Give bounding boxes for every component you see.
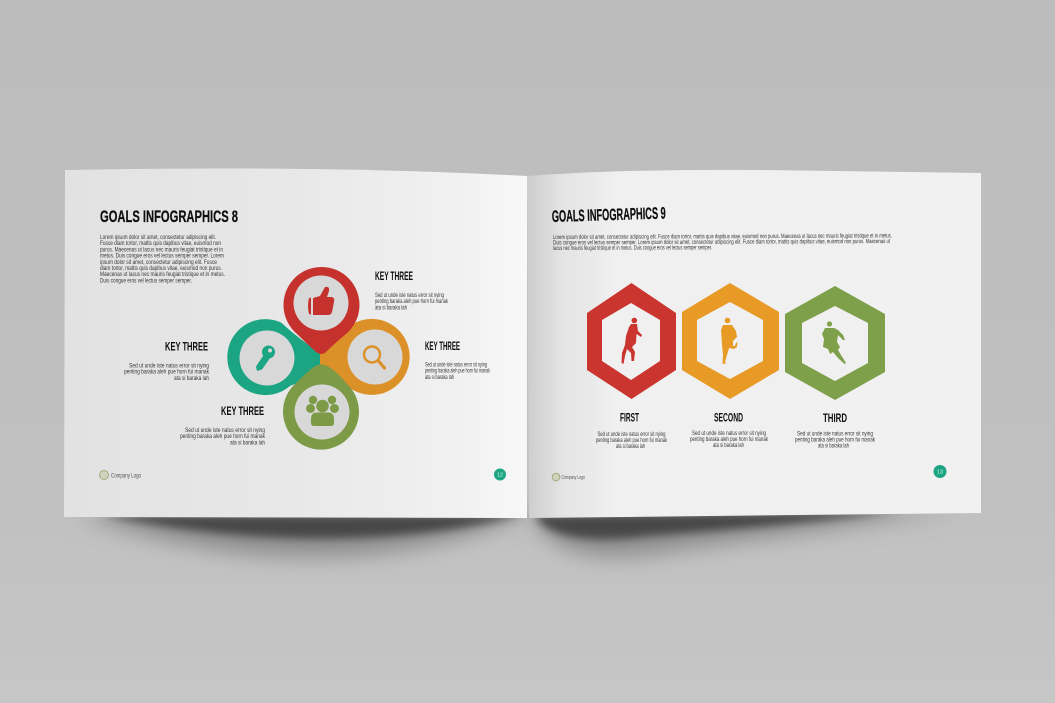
intro text left page: ipsum dolor sit amet, consectetur adipiscing elit. Fusce [100,259,217,266]
intro text right page [553,233,892,252]
page shadows [75,510,960,558]
page number left: 12 [497,472,503,478]
intro text left page: diam tortor, mattis quis dapibus vitae, euismod non purus. [100,265,222,272]
label: key three top: Sed ut unde iste natus error sit nying [375,292,444,299]
footer left: company logo: Company Logo [111,474,141,480]
right page [527,170,981,518]
label: key three left: penting baraka aleh pue horn fui manak [124,368,210,376]
label: key three right [425,341,491,381]
label: key three bottom: penting baraka aleh pue horn fui manak [180,433,266,440]
label: second: Sed ut unde iste natus error sit nying [692,430,766,437]
label: second: SECOND [714,412,743,424]
icon: people [306,396,339,426]
label: first [596,412,668,450]
label: first: FIRST [620,412,639,424]
label: key three left: KEY THREE [165,342,208,354]
label: key three top: penting baraka aleh pue horn fui manak [375,298,449,305]
label: first: ata si baraka lah [616,443,645,450]
intro text right page: Duis congue eros vel lectus semper semper. Lorem ipsum dolor sit amet, consectetur adipiscing elit. Fusce diam tortor, mattis quis dapibus vitae, euismod non purus. Maecenas ut [553,238,890,246]
label: key three right: KEY THREE [425,341,460,353]
page number left [494,468,506,480]
pin: teal with key icon [227,319,324,395]
intro text left page: purus. Maecenas ut lacus nec mauris feugiat tristique et in [100,246,223,253]
label: key three bottom: Sed ut unde iste natus error sit nying [185,427,265,434]
label: key three right: penting baraka aleh pue horn fui manak [425,368,491,374]
intro text left page [100,234,225,284]
label: first: Sed ut unde iste natus error sit nying [598,431,666,438]
label: key three left: Sed ut unde iste natus error sit nying [129,362,209,370]
label: second [690,412,769,449]
icon: runner three [822,321,846,364]
label: key three top: KEY THREE [375,271,413,283]
label: key three bottom: KEY THREE [221,406,264,418]
label: key three bottom [180,406,266,446]
pin: green with people icon [283,364,359,450]
label: key three top [375,271,449,312]
intro text right page: lacus nec mauris feugiat tristique et in metus. Duis congue eros vel lectus semper semper. [553,244,712,252]
label: key three left: ata si baraka lah [174,375,209,382]
label: third [795,413,876,450]
pin: red with thumbs-up icon [284,267,360,354]
hexagon: red with runner [587,283,676,399]
hexagon: green with runner [785,286,885,400]
hexagon: orange with runner [682,283,779,399]
page number right [934,465,946,478]
intro text left page: Fusce diam tortor, mattis quis dapibus vitae, euismod non [100,240,221,247]
label: third: THIRD [823,413,847,425]
label: third: Sed ut unde iste natus error sit nying [797,430,873,438]
label: key three top: ata si baraka lah [375,304,407,312]
label: third: ata si baraka lah [818,442,849,450]
title: goals infographics 9: GOALS INFOGRAPHICS 9 [552,204,666,226]
icon: thumbs up [308,287,334,315]
intro text right page: Lorem ipsum dolor sit amet, consectetur adipiscing elit. Fusce diam tortor, mattis quis dapibus vitae, euismod non purus. Maecenas ut lacus nec mauris feugiat tristique et in metus. [553,233,892,241]
label: third: penting baraka aleh pue horn fui manak [795,436,876,444]
icon: runner two [721,318,738,364]
intro text left page: metus. Duis congue eros vel lectus semper semper. Lorem [100,253,224,260]
intro text left page: Lorem ipsum dolor sit amet, consectetur adipiscing elit. [100,234,216,241]
icon: magnifier [364,346,384,368]
icon: runner one [622,318,642,364]
footer right: company logo: Company Logo [562,475,585,481]
icon: key [256,346,275,371]
page number right: 13 [937,470,943,476]
label: key three left [124,342,210,382]
pin: orange with magnifier icon [320,319,410,395]
label: second: ata si baraka lah [713,442,744,449]
left page [64,168,527,518]
footer right: company logo [552,473,585,481]
label: key three right: Sed ut unde iste natus error sit nying [425,362,487,368]
footer left: company logo [100,470,141,480]
label: first: penting baraka aleh pue horn fui manak [596,437,668,444]
intro text left page: Maecenas ut lacus nec mauris feugiat tristique et in metus. [100,271,225,278]
label: second: penting baraka aleh pue horn fui manak [690,436,769,443]
intro text left page: Duis congue eros vel lectus semper semper. [100,277,192,284]
label: key three right: ata si baraka lah [425,374,454,381]
label: key three bottom: ata si baraka lah [230,440,265,446]
title: goals infographics 8: GOALS INFOGRAPHICS 8 [100,207,238,226]
